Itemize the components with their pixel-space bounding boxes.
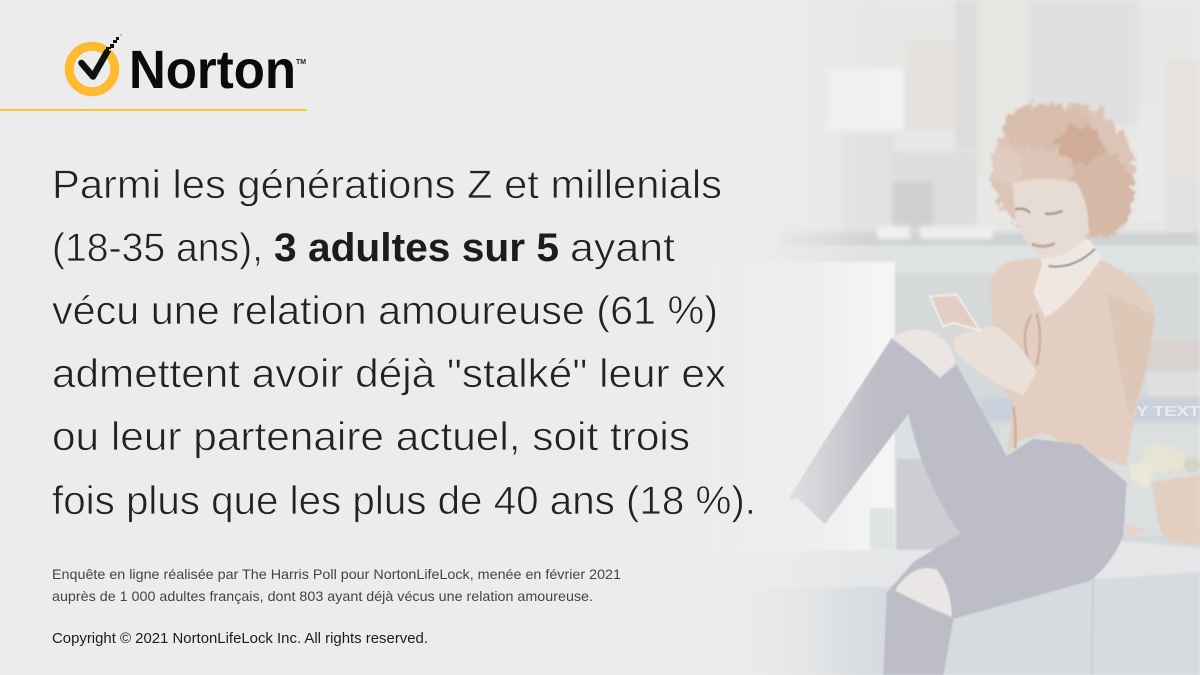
photo: lower backdrop and white wall (700, 247, 1200, 553)
survey footnote: auprès de 1 000 adultes français, dont 803 ayant déjà vécus une relation amoureuse. (52, 588, 593, 604)
background photo: city skyline (620, 0, 1200, 247)
choker (1048, 249, 1095, 267)
hair (992, 103, 1135, 238)
neck and chest (1033, 239, 1102, 317)
copyright: Copyright © 2021 NortonLifeLock Inc. All rights reserved. (52, 631, 428, 647)
photo: seated woman with phone (780, 103, 1200, 675)
main statement text: (18-35 ans), (52, 226, 263, 270)
legs: dark jeans (789, 338, 1127, 675)
logo check mark (82, 34, 122, 76)
main statement text: Parmi les générations Z et millenials (52, 163, 722, 207)
fade overlay from left (690, 0, 880, 675)
yellow rule under logo (0, 109, 307, 111)
logo ring (69, 46, 115, 92)
logo wordmark: Norton (129, 40, 296, 100)
lace (1013, 313, 1040, 448)
main statement text: fois plus que les plus de 40 ans (18 %). (52, 479, 756, 523)
trademark: TM (296, 59, 306, 66)
main statement text: admettent avoir déjà "stalké" leur ex (52, 352, 726, 396)
torso top (990, 258, 1154, 467)
flower pot (1130, 444, 1200, 544)
main statement text: ayant (570, 226, 675, 270)
arm sleeve (1023, 372, 1133, 460)
foot (780, 497, 825, 554)
survey footnote (52, 566, 621, 604)
main statement text: vécu une relation amoureuse (61 %) (52, 289, 718, 333)
main statement text: ou leur partenaire actuel, soit trois (52, 415, 690, 459)
photo: concrete ledge (700, 533, 1200, 675)
main statement text: 3 adultes sur 5 (274, 226, 559, 270)
hands and phone (930, 294, 1037, 395)
main statement text (52, 163, 756, 523)
logo: Norton (69, 34, 306, 100)
face (1013, 179, 1089, 258)
photo: lettering on distant banner: Y TEXT (1136, 403, 1200, 420)
knees skin (892, 329, 955, 378)
survey footnote: Enquête en ligne réalisée par The Harris Poll pour NortonLifeLock, menée en février 2021 (52, 566, 621, 582)
hand on ledge (1125, 522, 1148, 535)
